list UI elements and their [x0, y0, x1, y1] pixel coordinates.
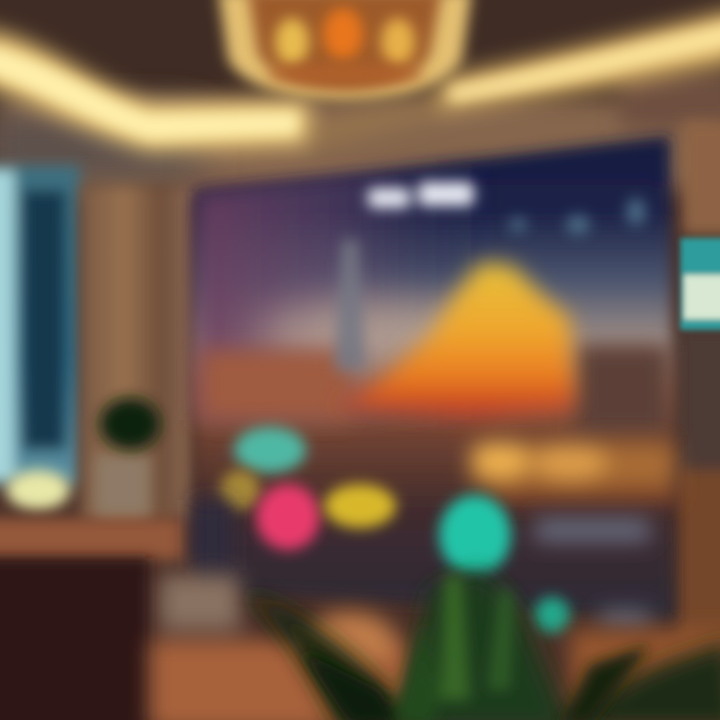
display panel [196, 136, 680, 628]
small sky marks [509, 198, 646, 235]
right wall [678, 120, 720, 650]
panel glow: horizon [260, 300, 520, 370]
desk [0, 500, 232, 720]
cove light core [0, 20, 720, 140]
curtain [80, 185, 192, 520]
potted plant [95, 398, 160, 520]
cove light band [0, 8, 720, 152]
yellow bubble [324, 484, 396, 528]
shelf row [470, 442, 680, 502]
white heading smudge [368, 182, 474, 208]
yellow patch left [220, 470, 260, 510]
window [0, 165, 80, 485]
small teal circle [534, 597, 570, 633]
pink bubble [256, 484, 320, 550]
teal circle [439, 495, 511, 575]
panel shade: right skyline [575, 345, 670, 435]
chandelier [218, 0, 472, 100]
mountain chart [335, 262, 574, 418]
right screen [680, 238, 720, 330]
teal bubble [234, 427, 306, 473]
table lamp glow [6, 470, 70, 510]
tower [334, 240, 366, 370]
floor [150, 575, 720, 720]
panel shade: left city [200, 350, 350, 420]
foreground plant [240, 570, 720, 720]
lower panel text smudges [535, 518, 650, 628]
